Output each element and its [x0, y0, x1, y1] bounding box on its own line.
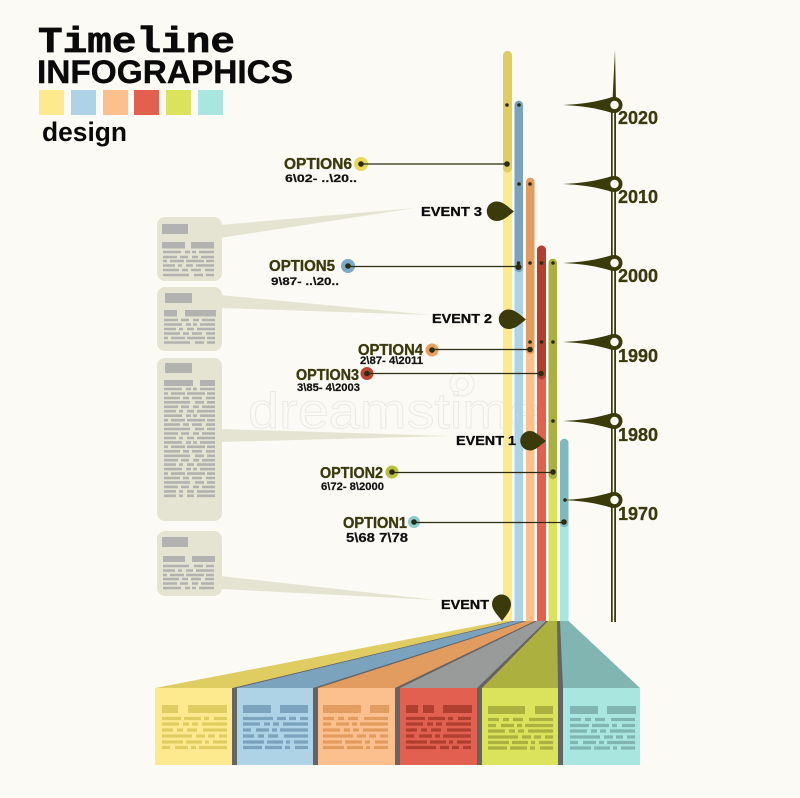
- option 5 marker: 9\87- ..\20..: [271, 276, 339, 288]
- option 1 marker: [343, 515, 567, 545]
- option 6 marker: [284, 156, 510, 185]
- title line: Timeline: Timeline: [38, 22, 235, 63]
- bottom box: orange: [318, 688, 395, 765]
- option 2 marker: 6\72- 8\2000: [321, 481, 384, 493]
- option 1 marker: OPTION1: [343, 515, 407, 532]
- callout panel: event 1: [157, 358, 450, 521]
- year marker 2010: [563, 176, 658, 207]
- year marker 2000: [563, 255, 658, 286]
- year axis: [563, 50, 658, 622]
- option 2 marker: OPTION2: [320, 465, 383, 482]
- option 3 marker: OPTION3: [296, 367, 359, 384]
- bottom box: blue: [237, 688, 313, 765]
- watermark: dreamstime: [248, 383, 540, 439]
- funnel connector strips: [155, 621, 640, 765]
- bar: option 3 red: [537, 246, 546, 622]
- year marker 2000: 2000: [618, 266, 658, 286]
- option 3 marker: 3\85- 4\2003: [297, 382, 360, 394]
- bottom box: yellow: [155, 688, 232, 765]
- event 3: [421, 202, 514, 221]
- callout panel: event: [157, 531, 436, 600]
- colour swatches: [39, 90, 223, 115]
- year marker 2020: [563, 97, 658, 128]
- bar: option 6 yellow: [503, 51, 512, 622]
- event: [441, 594, 511, 621]
- year marker 2010: 2010: [618, 187, 658, 207]
- year marker 1980: 1980: [618, 425, 658, 445]
- bar: option 2 green: [548, 259, 557, 622]
- option 2 marker: [320, 465, 556, 493]
- event 2: EVENT 2: [432, 311, 492, 326]
- callout panel: event 3: [157, 208, 415, 281]
- title line: INFOGRAPHICS: INFOGRAPHICS: [37, 54, 293, 90]
- option 6 marker: OPTION6: [284, 156, 352, 173]
- year marker 1990: [563, 334, 658, 366]
- year marker 2020: 2020: [618, 108, 658, 128]
- option 1 marker: 5\68 7\78: [346, 530, 408, 545]
- callout panel: event 2: [157, 287, 432, 351]
- small tick dots on bars: [505, 103, 567, 502]
- event 2: [432, 310, 526, 329]
- bar: option 4 orange: [526, 178, 534, 622]
- option 5 marker: OPTION5: [269, 258, 335, 275]
- year marker 1990: 1990: [618, 346, 658, 366]
- event 1: EVENT 1: [456, 433, 516, 448]
- year marker 1970: 1970: [618, 504, 658, 524]
- option 3 marker: [296, 367, 544, 394]
- option 4 marker: 2\87- 4\2011: [360, 355, 423, 367]
- bottom box: red: [400, 688, 477, 765]
- option 5 marker: [269, 258, 522, 288]
- option 6 marker: 6\02- ..\20..: [285, 173, 357, 185]
- bottom box: green: [482, 688, 558, 765]
- option 4 marker: OPTION4: [358, 342, 423, 359]
- option 4 marker: [358, 342, 533, 367]
- title: [37, 22, 293, 147]
- year marker 1980: [563, 413, 658, 445]
- title line: design: design: [42, 117, 127, 147]
- event: EVENT: [441, 597, 489, 612]
- year marker 1970: [563, 492, 658, 524]
- event 3: EVENT 3: [421, 204, 482, 219]
- bar: option 1 teal: [560, 439, 568, 622]
- bar: option 5 blue: [514, 101, 523, 622]
- bottom box: teal: [563, 688, 640, 765]
- vertical colour bars: [503, 51, 568, 622]
- event 1: [456, 431, 546, 450]
